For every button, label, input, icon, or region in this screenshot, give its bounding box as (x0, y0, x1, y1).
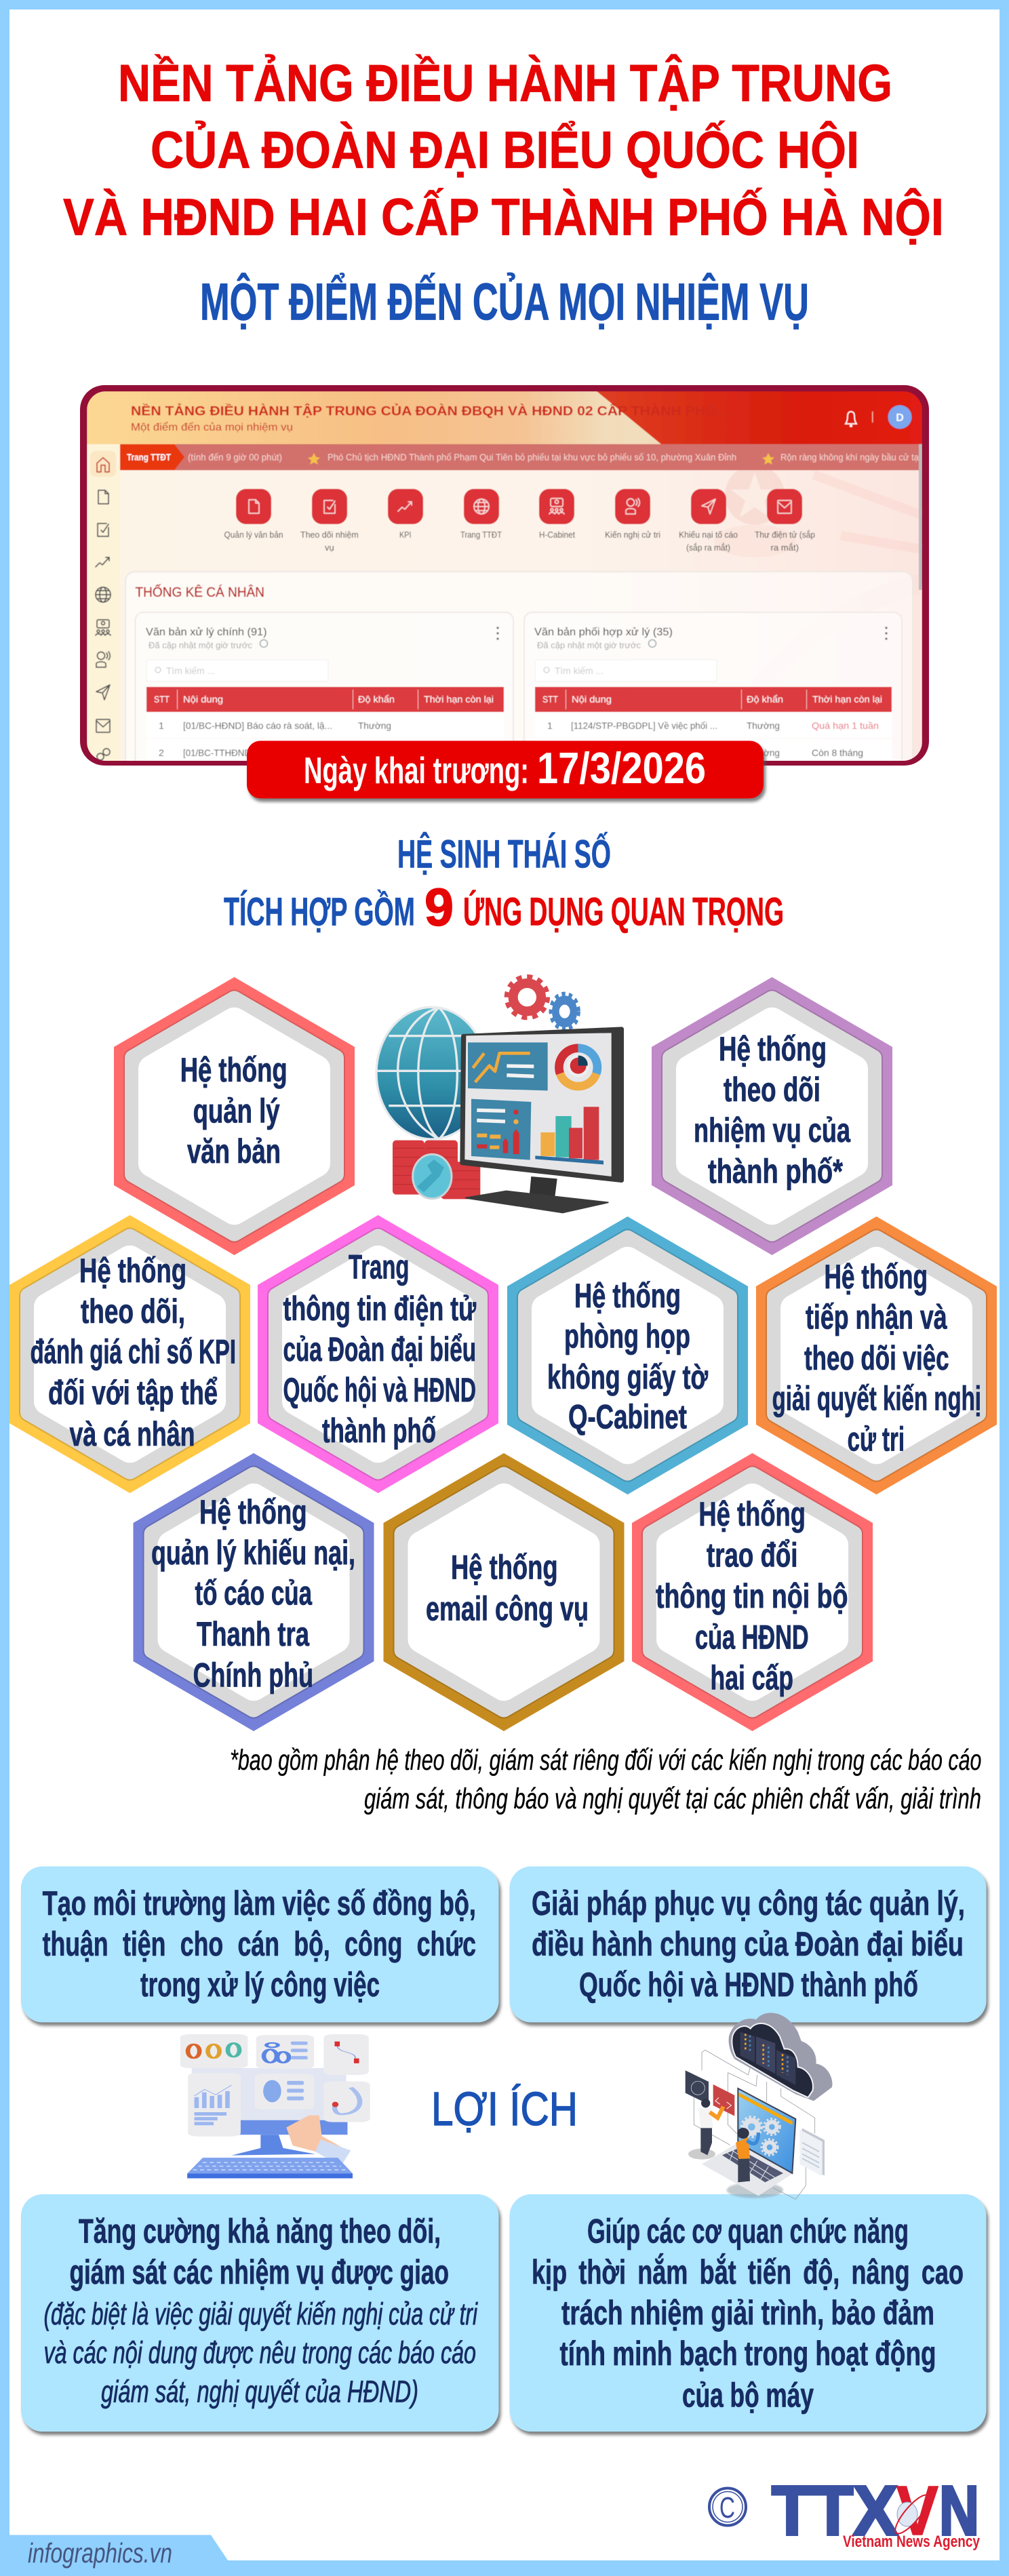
hexagon: city task tracking: theo dõi (724, 1071, 820, 1109)
hexagon: official email: email công vụ (426, 1589, 589, 1627)
scrollbar (919, 444, 922, 590)
right table card (524, 612, 902, 775)
hexagon: internal information exchange: trao đổi (707, 1537, 797, 1574)
benefit card: task monitoring (21, 2194, 499, 2432)
right table card: Đã cập nhật một giờ trước (537, 641, 641, 650)
app shortcut buttons: (sắp ra mắt) (686, 542, 730, 553)
hexagon: internal information exchange: hai cấp (711, 1659, 793, 1697)
hexagon: electronic information portal: Quốc hội và HĐND (283, 1371, 476, 1409)
copyright mark: C (719, 2491, 735, 2524)
news ticker (120, 444, 919, 471)
left table card: [01/BC-HĐND] Báo cáo rà soát, lậ... (183, 720, 332, 731)
left table card: Nội dung (183, 694, 223, 705)
benefit card: digital workplace (21, 1866, 499, 2022)
illustration: globe and monitor dashboard (376, 977, 622, 1212)
hexagon: KPI evaluation: đánh giá chỉ số KPI (31, 1333, 236, 1371)
left table card (136, 612, 513, 775)
benefit card: accountability (510, 2194, 986, 2432)
hexagon: complaints management: Thanh tra (197, 1615, 310, 1653)
hexagon: paperless meeting room: không giấy tờ (547, 1358, 708, 1396)
document (799, 2128, 825, 2176)
illustration: cloud and laptop team (686, 2013, 832, 2199)
app shortcut buttons: KPI (399, 530, 412, 540)
thumb up hand (286, 2116, 351, 2166)
app shortcut buttons: Theo dõi nhiệm (300, 530, 359, 540)
left table card: [01/BC-TTHĐND (183, 747, 251, 758)
heading: digital ecosystem: ỨNG DỤNG QUAN TRỌNG (463, 890, 784, 934)
app shortcut buttons: Thư điện tử (sắp (755, 530, 815, 540)
benefit card: digital workplace: thuận tiện cho cán bộ, công chức (43, 1925, 476, 1963)
footer tab: infographics.vn (28, 2537, 172, 2569)
news ticker: (tính đến 9 giờ 00 phút) (188, 452, 282, 462)
hexagon: internal information exchange: của HĐND (695, 1618, 809, 1656)
copyright mark (709, 2489, 746, 2525)
hexagon: KPI evaluation: theo dõi, (81, 1292, 185, 1330)
hexagon: city task tracking: nhiệm vụ của (694, 1111, 851, 1149)
title: NỀN TẢNG ĐIỀU HÀNH TẬP TRUNG (118, 54, 892, 113)
footnote (230, 1744, 982, 1815)
panel: application screenshot (80, 385, 929, 775)
right table card: Thời hạn còn lại (812, 694, 882, 705)
left table card: STT (154, 694, 170, 705)
benefit card: task monitoring: và các nội dung được nêu trong các báo cáo (43, 2335, 476, 2370)
hexagon: document management: văn bản (187, 1132, 281, 1170)
right table card: Độ khẩn (747, 694, 783, 705)
hexagon: city task tracking: Hệ thống (719, 1030, 827, 1068)
globe (376, 1007, 487, 1139)
app shortcut buttons (224, 489, 815, 553)
hexagon: voter petitions: tiếp nhận và (806, 1298, 947, 1336)
wrench coin (413, 1154, 452, 1199)
hexagon: document management: Hệ thống (180, 1051, 288, 1089)
logo: TTXVN (772, 2472, 981, 2551)
card details (188, 2042, 360, 2125)
person at panels (688, 2099, 724, 2160)
right table card: Nội dung (572, 694, 612, 705)
hexagon: paperless meeting room: Hệ thống (574, 1277, 681, 1315)
hexagon: KPI evaluation: Hệ thống (79, 1252, 186, 1290)
heading: digital ecosystem: 9 (424, 877, 454, 937)
app shortcut buttons: Trang TTĐT (460, 530, 502, 540)
floating panels (686, 2070, 734, 2116)
hexagon: voter petitions: cử tri (848, 1420, 905, 1458)
app shortcut buttons: H-Cabinet (539, 530, 575, 540)
left table card: 2 (159, 747, 164, 758)
bell and avatar (846, 405, 911, 429)
logo: TTXVN: V (896, 2472, 938, 2550)
hexagon: document management: quản lý (193, 1092, 280, 1130)
benefit card: digital workplace: trong xử lý công việc (140, 1966, 380, 2004)
heading: digital ecosystem (224, 833, 784, 937)
right table card: Quá hạn 1 tuần (812, 720, 879, 731)
hexagon: official email: Hệ thống (451, 1549, 558, 1587)
hexagon: internal information exchange (632, 1453, 873, 1731)
benefit card: task monitoring: (đặc biệt là việc giải quyết kiến nghị của cử tri (43, 2297, 478, 2331)
hexagon: complaints management: Hệ thống (199, 1493, 307, 1531)
app shortcut buttons: Khiếu nại tố cáo (679, 530, 738, 540)
monitor (192, 2068, 347, 2156)
hexagon: electronic information portal: Trang (349, 1248, 410, 1286)
benefit card: accountability: của bộ máy (682, 2376, 814, 2414)
benefit card: task monitoring: giám sát các nhiệm vụ được giao (69, 2253, 449, 2291)
screenshot content background (119, 469, 922, 761)
right table card: Còn 8 tháng (812, 747, 863, 758)
heading: digital ecosystem: TÍCH HỢP GỒM (224, 890, 415, 934)
right table card: Văn bản phối hợp xử lý (35) (534, 627, 673, 638)
right table card: 1 (547, 720, 553, 731)
launch date badge (247, 740, 764, 799)
right table card: Thường (747, 720, 780, 731)
hexagon: electronic information portal (258, 1215, 498, 1493)
left table card: Tìm kiếm ... (166, 665, 215, 676)
left table card: Đã cập nhật một giờ trước (149, 641, 252, 650)
floating cards (180, 2034, 370, 2137)
hexagon: KPI evaluation: đối với tập thể (48, 1374, 218, 1412)
right table card: STT (542, 694, 558, 705)
left table card: Văn bản xử lý chính (91) (146, 627, 267, 638)
right table card: [1124/STP-PBGDPL] Về việc phối ... (571, 720, 717, 731)
news ticker: Trang TTĐT (127, 452, 171, 462)
hexagon: voter petitions (756, 1216, 997, 1494)
hexagon: official email (384, 1453, 624, 1731)
hexagon: internal information exchange: thông tin nội bộ (656, 1577, 848, 1615)
hexagon: complaints management (133, 1453, 374, 1731)
benefit card: task monitoring: Tăng cường khả năng theo dõi, (79, 2212, 441, 2250)
personal statistics panel (125, 572, 913, 775)
faint emblem (716, 471, 922, 594)
logo: TTXVN: N (939, 2472, 979, 2550)
left table card: 1 (159, 720, 164, 731)
hexagon: complaints management: Chính phủ (193, 1656, 313, 1694)
app shortcut buttons: Kiến nghị cử tri (605, 530, 660, 540)
hexagon: KPI evaluation: và cá nhân (69, 1415, 195, 1453)
sidebar (87, 444, 120, 763)
header band: NỀN TẢNG ĐIỀU HÀNH TẬP TRUNG CỦA ĐOÀN ĐBQH VÀ HĐND 02 CẤP THÀNH PHỐ... (131, 403, 728, 419)
benefit card: task monitoring: giám sát, nghị quyết của HĐND) (101, 2375, 418, 2409)
hexagon: internal information exchange: Hệ thống (698, 1495, 806, 1533)
right table card: Tìm kiếm ... (555, 665, 604, 676)
title: CỦA ĐOÀN ĐẠI BIỂU QUỐC HỘI (151, 121, 859, 179)
hexagon: complaints management: tố cáo của (195, 1574, 313, 1612)
cloud servers (729, 2013, 832, 2101)
laptop (702, 2088, 795, 2198)
hexagon: electronic information portal: của Đoàn đại biểu (283, 1330, 476, 1368)
left table card: Thường (358, 720, 391, 731)
red cylinders (393, 1141, 480, 1199)
left table card: Thời hạn còn lại (424, 694, 494, 705)
hexagon: paperless meeting room: phòng họp (564, 1317, 690, 1355)
heading: benefits: LỢI ÍCH (431, 2082, 578, 2135)
launch date badge: 17/3/2026 (537, 743, 706, 793)
header band: Một điểm đến của mọi nhiệm vụ (131, 421, 293, 433)
logo: TTXVN: TTX (772, 2472, 898, 2550)
hexagon: electronic information portal: thành phố (322, 1412, 436, 1450)
app shortcut buttons: vụ (325, 542, 334, 553)
header band (87, 391, 922, 444)
gears (507, 977, 578, 1029)
hexagon: paperless meeting room (507, 1216, 748, 1494)
hexagon: paperless meeting room: Q-Cabinet (568, 1398, 687, 1436)
news ticker: Phó Chủ tịch HĐND Thành phố Phạm Qui Tiên bỏ phiếu tại khu vực bỏ phiếu số 10, phường Xuân Đỉnh (328, 452, 736, 462)
monitor (462, 1029, 622, 1212)
benefit card: digital workplace: Tạo môi trường làm việc số đồng bộ, (43, 1884, 476, 1922)
app shortcut buttons: Quản lý văn bản (224, 530, 283, 540)
right table card: Thường (747, 747, 780, 758)
left table card: Độ khẩn (358, 694, 395, 705)
connector lines (694, 2050, 815, 2199)
illustration: computer with thumbs up (180, 2034, 370, 2178)
hexagon: complaints management: quản lý khiếu nại, (151, 1534, 355, 1572)
app shortcut buttons: ra mắt) (770, 542, 799, 553)
benefit card: management solution (510, 1866, 986, 2022)
news ticker: Rộn ràng không khí ngày bầu cử tạ (780, 452, 919, 462)
hexagon: city task tracking (652, 977, 892, 1255)
person at laptop (736, 2128, 758, 2182)
hexagon: KPI evaluation (9, 1215, 250, 1493)
launch date badge: Ngày khai trương: (304, 749, 529, 791)
hexagon: city task tracking: thành phố* (708, 1153, 843, 1191)
hexagon: voter petitions: theo dõi việc (804, 1339, 949, 1377)
title (63, 54, 944, 247)
hexagon: document management (114, 977, 355, 1255)
bell and avatar: D (896, 412, 904, 424)
hexagon: electronic information portal: thông tin điện tử (283, 1290, 477, 1328)
keyboard (187, 2158, 353, 2178)
heading: digital ecosystem: HỆ SINH THÁI SỐ (397, 833, 611, 876)
personal statistics panel: THỐNG KÊ CÁ NHÂN (136, 584, 264, 600)
hexagon: voter petitions: Hệ thống (825, 1258, 928, 1296)
